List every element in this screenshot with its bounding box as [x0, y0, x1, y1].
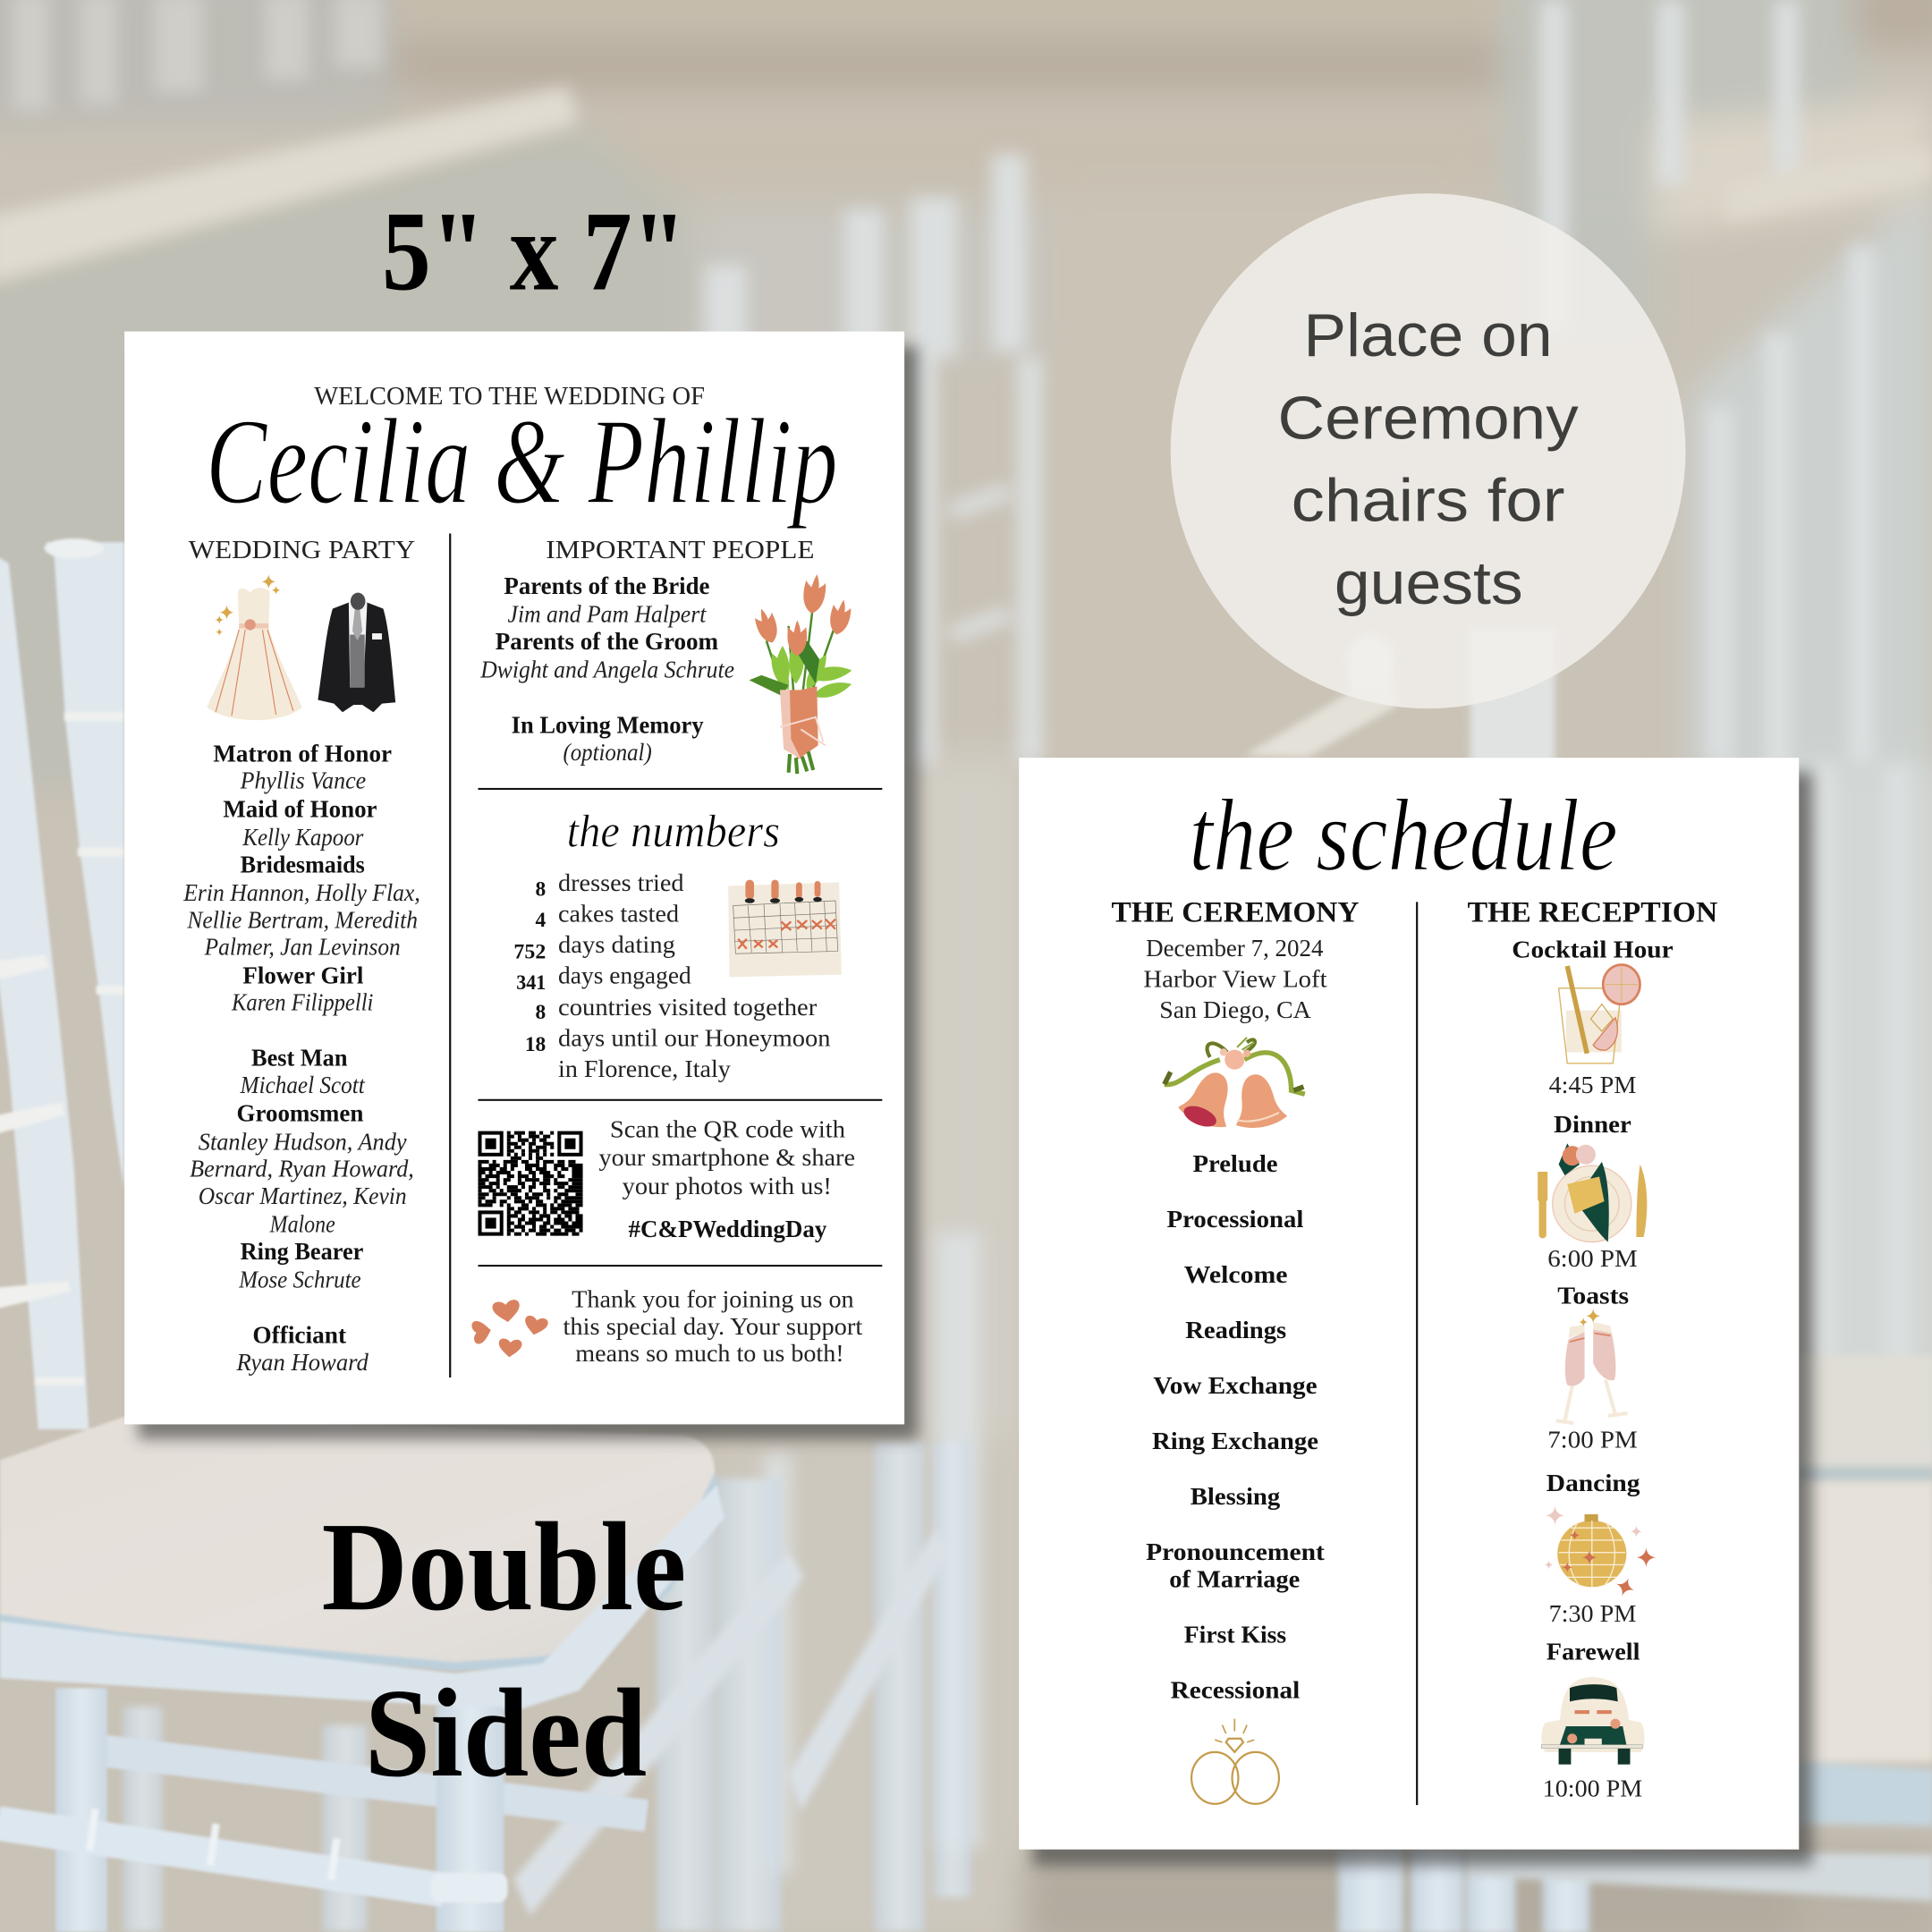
- heading: wedding party: WEDDING PARTY: [189, 536, 415, 564]
- callout: placement circle: Place on: [1303, 302, 1553, 369]
- list: wedding party names: Oscar Martinez, Kevin: [199, 1182, 407, 1209]
- timeline: farewell: 10:00 PM: [1543, 1774, 1642, 1801]
- divider: section rules: [478, 788, 882, 1267]
- list: wedding party names: Ring Bearer: [241, 1237, 363, 1265]
- icon: wedding rings: [1191, 1719, 1279, 1804]
- list: wedding party names: Mose Schrute: [238, 1266, 361, 1293]
- text block: date and venue: Harbor View Loft: [1143, 964, 1327, 992]
- list: the numbers: dresses tried: [558, 869, 684, 896]
- list: wedding party names: Bernard, Ryan Howard,: [190, 1155, 414, 1182]
- list: the numbers: [513, 869, 831, 1082]
- heading: double sided: [322, 1496, 686, 1803]
- list: wedding party names: Officiant: [252, 1321, 347, 1349]
- chair back posts: [0, 557, 89, 1429]
- script title: the schedule: the schedule: [1189, 779, 1618, 894]
- timeline: toasts: 7:00 PM: [1547, 1426, 1638, 1453]
- list: wedding party names: Erin Hannon, Holly Flax,: [182, 878, 420, 906]
- timeline: cocktail hour: [1512, 935, 1674, 1098]
- icon: tulip bouquet: [750, 572, 853, 774]
- text block: important people: (optional): [564, 738, 652, 766]
- list: the numbers: 341: [516, 971, 546, 995]
- text block: QR instructions: [598, 1114, 855, 1242]
- text block: important people: [479, 572, 734, 766]
- timeline: farewell: [1541, 1638, 1645, 1801]
- callout: placement circle: chairs for: [1292, 468, 1564, 535]
- icon: wedding bells: [1165, 1038, 1305, 1132]
- chair seat: [0, 1417, 715, 1662]
- text block: important people: Parents of the Bride: [504, 572, 709, 599]
- heading: the ceremony: THE CEREMONY: [1112, 896, 1360, 928]
- timeline: farewell: Farewell: [1546, 1638, 1640, 1665]
- timeline: dancing: Dancing: [1546, 1469, 1640, 1496]
- text block: important people: Parents of the Groom: [496, 627, 718, 655]
- list: the numbers: days until our Honeymoon: [558, 1024, 831, 1052]
- text block: thank you: means so much to us both!: [575, 1339, 844, 1367]
- heading: important people: IMPORTANT PEOPLE: [546, 536, 815, 564]
- list: wedding party names: Matron of Honor: [213, 739, 392, 767]
- list: the numbers: 18: [525, 1033, 546, 1056]
- list: the numbers: 4: [536, 909, 547, 932]
- text block: QR instructions: your photos with us!: [623, 1172, 832, 1199]
- text block: date and venue: [1143, 934, 1327, 1023]
- text block: QR instructions: #C&PWeddingDay: [629, 1215, 827, 1242]
- timeline: dancing: [1545, 1469, 1656, 1627]
- QR code: [478, 1133, 583, 1234]
- list: ceremony order: Vow Exchange: [1153, 1371, 1318, 1399]
- list: wedding party names: Palmer, Jan Levinson: [204, 933, 401, 961]
- list: the numbers: cakes tasted: [558, 899, 679, 927]
- list: wedding party names: Ryan Howard: [236, 1348, 369, 1376]
- list: ceremony order: of Marriage: [1169, 1564, 1300, 1592]
- timeline: dinner: 6:00 PM: [1547, 1244, 1638, 1272]
- list: ceremony order: Blessing: [1191, 1482, 1280, 1510]
- script heading: the numbers: the numbers: [567, 805, 780, 857]
- list: wedding party names: Groomsmen: [236, 1099, 363, 1127]
- list: wedding party names: Stanley Hudson, Andy: [199, 1127, 407, 1155]
- panel: schedule card: [1019, 758, 1799, 1850]
- list: ceremony order: Ring Exchange: [1152, 1427, 1318, 1454]
- column: ceremony: [1112, 896, 1360, 1804]
- heading: card size: 5" x 7": [382, 190, 686, 315]
- list: wedding party names: Best Man: [251, 1044, 347, 1072]
- list: ceremony order: Pronouncement: [1146, 1538, 1326, 1565]
- list: the numbers: 8: [536, 1001, 546, 1024]
- text block: important people: In Loving Memory: [512, 711, 704, 739]
- heading: double sided: Sided: [365, 1663, 647, 1803]
- list: wedding party names: Michael Scott: [240, 1071, 366, 1098]
- timeline: dancing: 7:30 PM: [1549, 1599, 1636, 1627]
- list: wedding party names: Malone: [269, 1210, 335, 1238]
- text block: thank you: [564, 1285, 863, 1367]
- icon: calendar: [728, 880, 842, 977]
- heading: the reception: THE RECEPTION: [1468, 896, 1717, 928]
- text block: QR instructions: Scan the QR code with: [610, 1114, 845, 1142]
- timeline: dinner: Dinner: [1554, 1110, 1631, 1138]
- timeline: cocktail hour: Cocktail Hour: [1512, 935, 1674, 962]
- icon: groom tuxedo: [318, 593, 395, 712]
- list: wedding party names: [182, 739, 420, 1376]
- list: ceremony order: [1146, 1149, 1326, 1703]
- list: ceremony order: Recessional: [1171, 1675, 1301, 1703]
- card shadow: schedule back: [1032, 773, 1812, 1866]
- timeline: toasts: [1547, 1281, 1638, 1453]
- text block: date and venue: December 7, 2024: [1146, 934, 1324, 962]
- text block: important people: Dwight and Angela Schrute: [479, 656, 734, 683]
- list: ceremony order: Prelude: [1192, 1149, 1278, 1177]
- text block: thank you: Thank you for joining us on: [572, 1285, 854, 1313]
- callout: placement circle: guests: [1335, 550, 1523, 617]
- icon: hearts: [471, 1299, 549, 1358]
- list: the numbers: days engaged: [558, 961, 691, 988]
- list: wedding party names: Flower Girl: [242, 961, 364, 988]
- heading: double sided: Double: [322, 1496, 686, 1637]
- list: wedding party names: Maid of Honor: [223, 794, 377, 822]
- panel: program front card: [124, 332, 904, 1424]
- list: the numbers: 8: [536, 877, 546, 901]
- list: ceremony order: Welcome: [1184, 1260, 1288, 1288]
- script title: couple names: Cecilia & Phillip: [206, 393, 838, 530]
- heading: welcome line: WELCOME TO THE WEDDING OF: [314, 382, 705, 411]
- text block: date and venue: San Diego, CA: [1159, 996, 1311, 1023]
- list: ceremony order: Processional: [1167, 1205, 1304, 1233]
- icon: wedding dress: [207, 574, 302, 720]
- list: wedding party names: Phyllis Vance: [240, 767, 366, 794]
- text block: QR instructions: your smartphone & share: [598, 1143, 855, 1171]
- timeline: toasts: Toasts: [1557, 1281, 1629, 1309]
- text block: important people: Jim and Pam Halpert: [508, 600, 708, 628]
- list: the numbers: 752: [513, 941, 546, 964]
- callout: placement circle: Ceremony: [1278, 385, 1579, 452]
- timeline: cocktail hour: 4:45 PM: [1549, 1071, 1636, 1098]
- list: wedding party names: Karen Filippelli: [231, 988, 373, 1016]
- card shadow: program front: [138, 346, 918, 1439]
- list: wedding party names: Bridesmaids: [241, 850, 365, 877]
- list: ceremony order: First Kiss: [1184, 1620, 1286, 1648]
- list: wedding party names: Nellie Bertram, Meredith: [186, 905, 418, 933]
- divider: column rule: [449, 533, 451, 1377]
- list: wedding party names: Kelly Kapoor: [242, 823, 364, 851]
- list: the numbers: countries visited together: [558, 993, 817, 1021]
- list: the numbers: in Florence, Italy: [558, 1055, 731, 1082]
- list: the numbers: days dating: [558, 930, 675, 958]
- divider: column rule: [1416, 902, 1418, 1805]
- timeline: dinner: [1538, 1110, 1647, 1272]
- callout: placement circle: [1171, 193, 1685, 708]
- column: reception: [1468, 896, 1717, 1801]
- right seat and rail: [1799, 1355, 1932, 1469]
- text block: thank you: this special day. Your support: [564, 1312, 863, 1340]
- list: ceremony order: Readings: [1185, 1316, 1286, 1343]
